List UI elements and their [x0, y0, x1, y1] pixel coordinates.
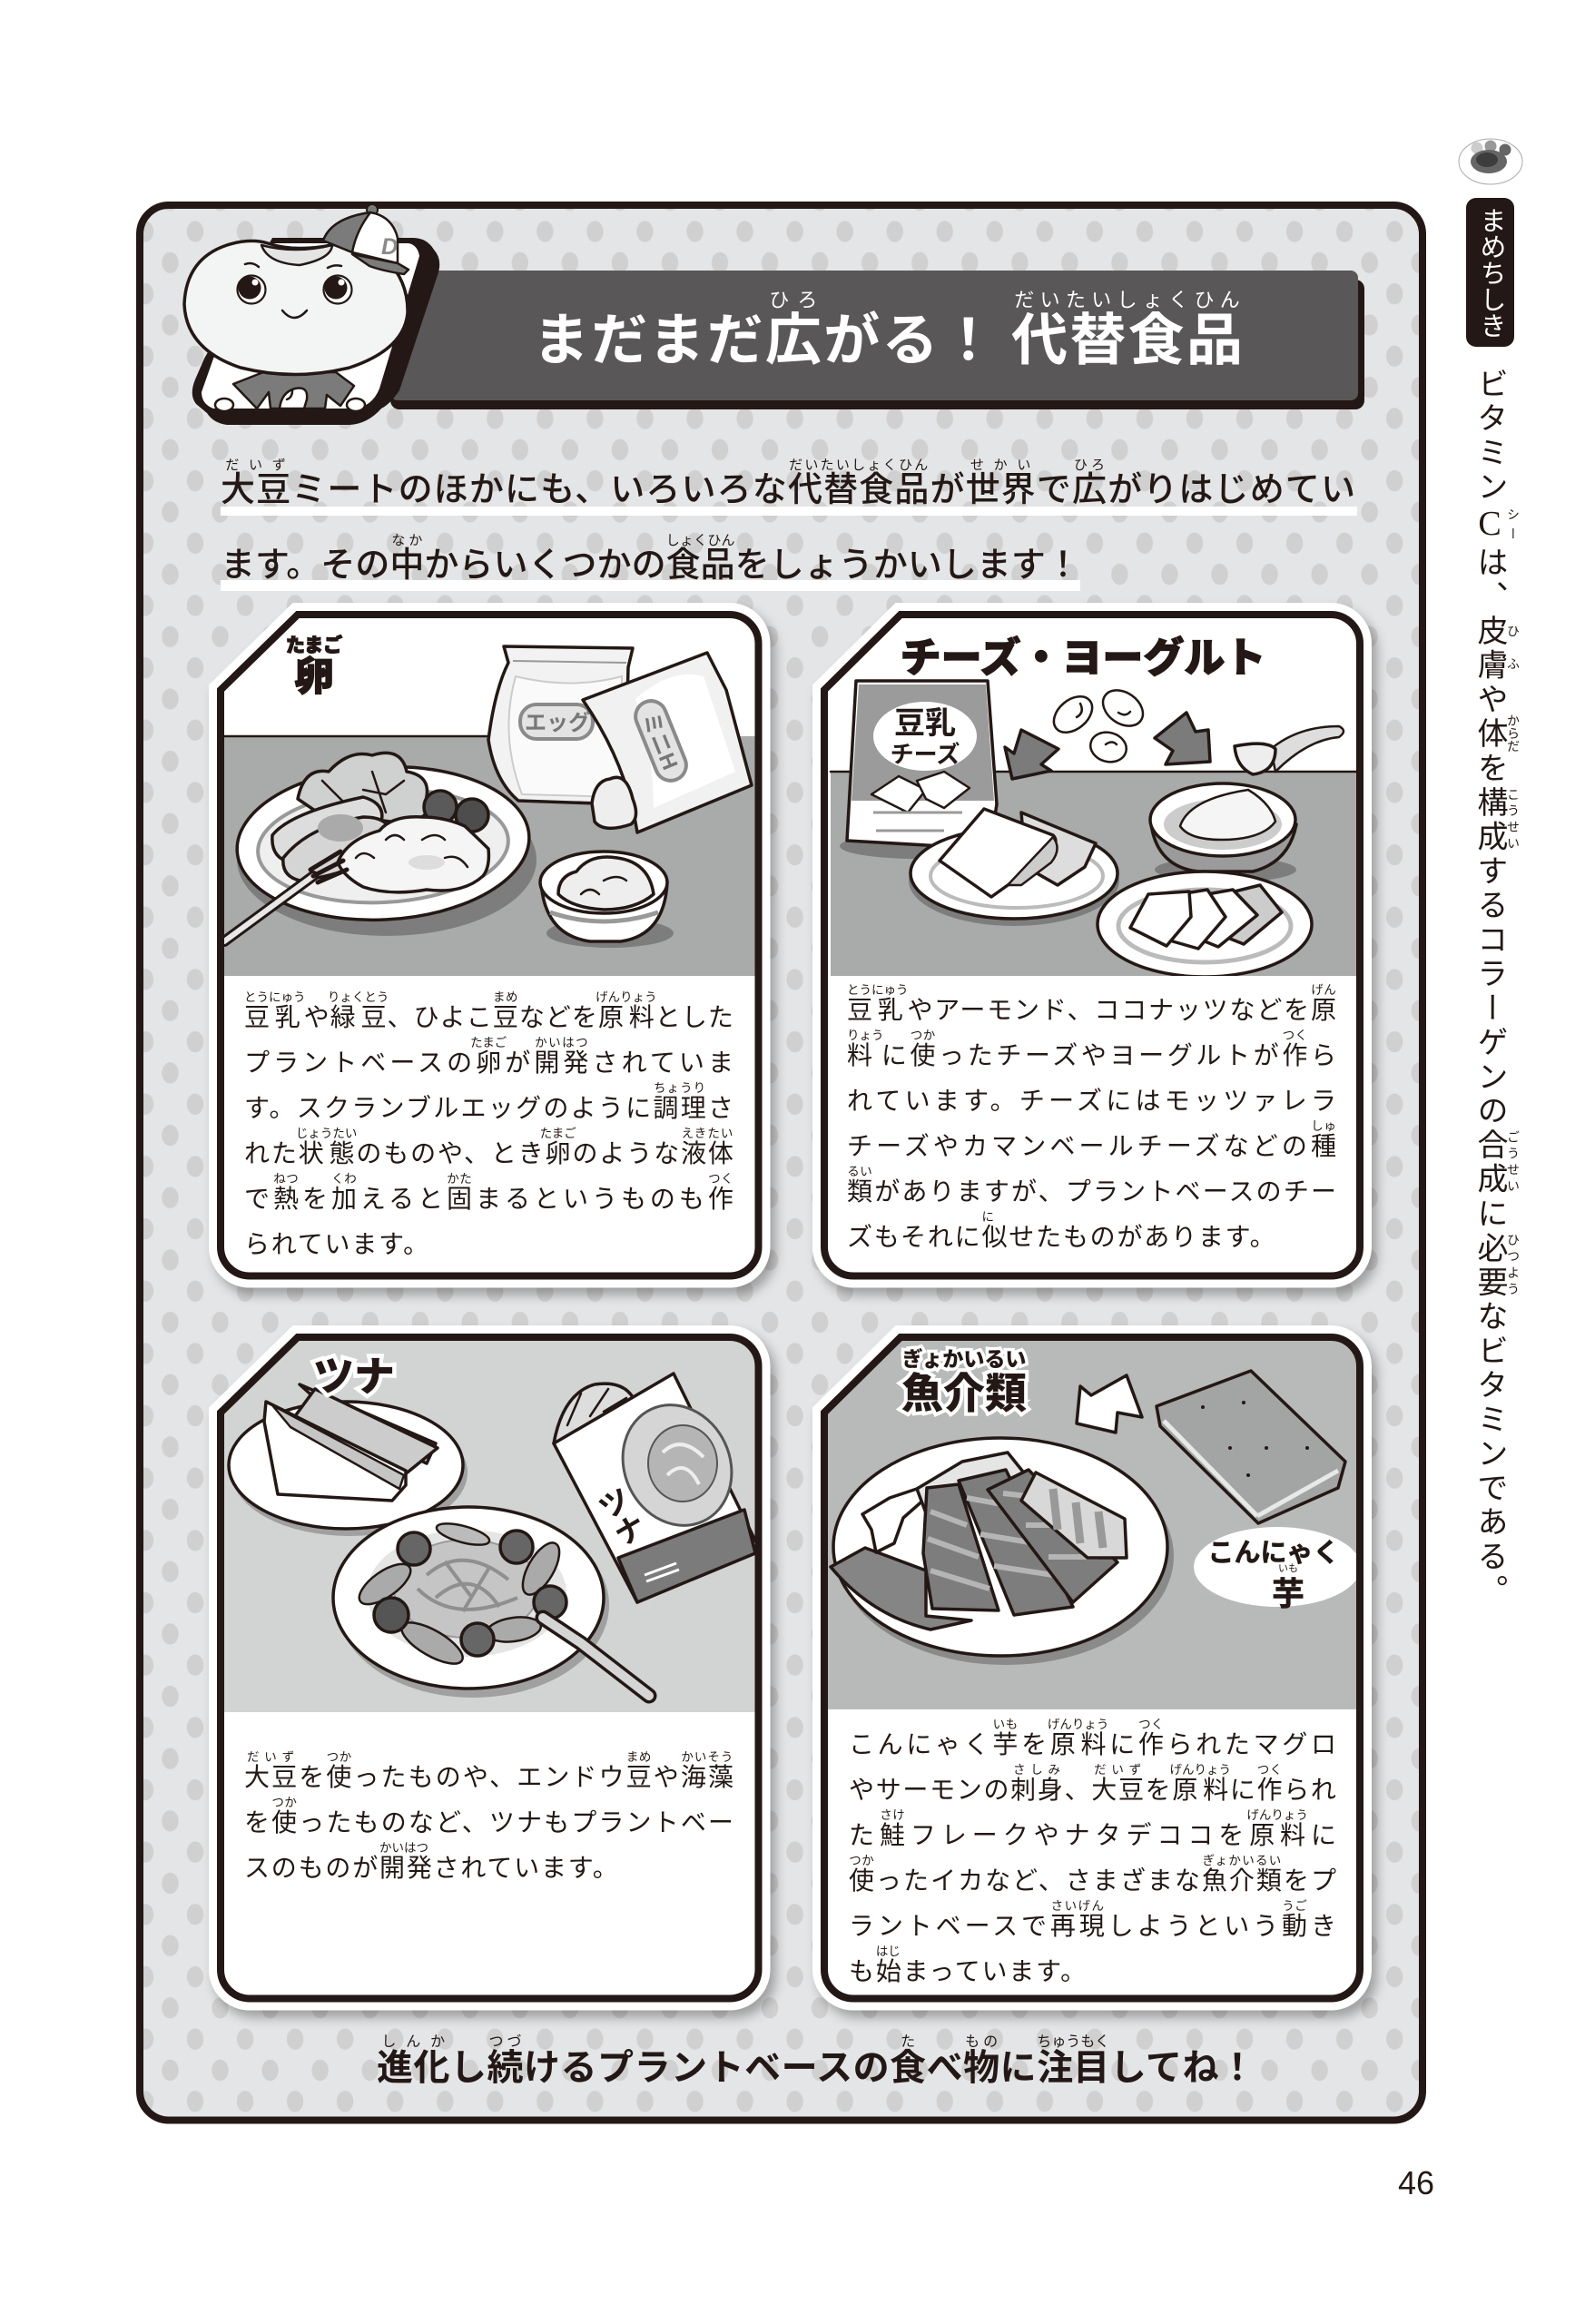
intro line 2: ます。その中なか からいくつかの食品しょくひん をしょうかいします！ — [221, 533, 1080, 585]
title banner with mascot — [182, 205, 1364, 425]
egg illustration and frame — [208, 603, 783, 1302]
egg bags: ミニH — [637, 709, 682, 773]
fork — [543, 1618, 649, 1696]
card heading: seafood — [901, 1347, 1027, 1417]
konjac label — [1194, 1527, 1361, 1612]
egg body text — [244, 990, 733, 1258]
arrow: white — [1077, 1375, 1142, 1433]
cheese illustration and frame — [812, 603, 1383, 1302]
tuna illustration and frame — [208, 1325, 783, 2024]
arrow: left — [1005, 730, 1058, 779]
plate with scrambled egg — [233, 753, 537, 936]
spoon — [1235, 726, 1344, 774]
egg bags: エッグ — [525, 710, 590, 735]
panel: seafood — [812, 1325, 1383, 2024]
seafood body text — [849, 1718, 1336, 1985]
side note vertical text: ビタミン Cシー は、 皮膚ひふ や体からだを 構成こうせい するコラーゲンの 合成ごうせい に 必要ひつよう なビタミンである。 — [1471, 368, 1521, 1605]
table — [822, 1334, 1366, 1709]
pasta plate — [333, 1507, 609, 1698]
icon: curry plate — [1458, 138, 1523, 185]
card heading: egg: たまご — [286, 635, 342, 656]
egg body text: 豆乳とうにゅう や緑豆りょくとう 、ひよこ豆まめ などを原料げんりょう とした — [244, 990, 733, 1031]
cheese body text: 料りょう に使つか ったチーズやヨーグルトが作つく ら — [847, 1029, 1336, 1069]
konjac block — [1157, 1371, 1345, 1523]
seafood illustration and frame — [812, 1325, 1383, 2024]
egg body text: で熱ねつ を加くわ えると固かた まるというものも作つく — [244, 1172, 733, 1213]
mascot card — [192, 238, 439, 425]
tuna body text: を使つか ったものなど、ツナもプラントベー — [244, 1796, 733, 1837]
card heading: tuna: ツナ — [313, 1354, 395, 1400]
page number: 46 — [1398, 2164, 1434, 2201]
soy milk cheese bag — [840, 681, 997, 859]
egg body text: られています。 — [244, 1230, 430, 1258]
egg body text: プラントベースの卵たまご が開発かいはつ されていま — [244, 1036, 733, 1077]
seafood body text: やサーモンの刺身さしみ 、大豆だいず を原料げんりょう に作つく られ — [849, 1763, 1336, 1804]
cheese body text: れています。チーズにはモッツァレラ — [847, 1087, 1336, 1115]
soy milk cheese bag: 豆乳 — [894, 706, 956, 741]
badge: mamechishiki — [1466, 198, 1514, 347]
panel: cheese and yogurt — [812, 603, 1383, 1302]
arrow: right — [1155, 713, 1210, 764]
tuna pack — [554, 1374, 755, 1602]
sashimi plate — [831, 1438, 1174, 1665]
tuna body text: 大豆だいず を使つか ったものや、エンドウ豆まめ や海藻かいそう — [244, 1750, 733, 1791]
mascot cap: D — [381, 234, 398, 260]
banner bar — [390, 271, 1364, 409]
tuna pack: ツナ — [589, 1482, 649, 1553]
cheese body text: 類るい がありますが、プラントベースのチー — [847, 1165, 1336, 1206]
cheese body text: ズもそれに似に せたものがあります。 — [847, 1210, 1276, 1251]
mascot cap — [323, 204, 409, 274]
card heading: cheese and yogurt: チーズ・ヨーグルト — [901, 635, 1265, 681]
bowl — [540, 852, 674, 948]
sandwich plate — [229, 1384, 468, 1536]
cheese body text: 豆乳とうにゅう やアーモンド、ココナッツなどを原げん — [847, 983, 1336, 1024]
tuna body text — [244, 1750, 733, 1882]
card heading: seafood: 魚介類 — [901, 1370, 1027, 1417]
card heading: egg — [286, 635, 342, 699]
cheese body text: チーズやカマンベールチーズなどの種しゅ — [847, 1119, 1336, 1160]
seafood body text: ラントベースで再現さいげん しようという動うご き — [849, 1899, 1336, 1940]
tuna body text: スのものが開発かいはつ されています。 — [244, 1841, 620, 1882]
cheese plate — [909, 809, 1119, 926]
konjac label: こんにゃく — [1207, 1539, 1340, 1568]
egg bags — [488, 646, 752, 832]
mascot head — [184, 241, 408, 374]
fork — [224, 852, 347, 941]
cheese body text — [847, 983, 1336, 1251]
egg body text: す。スクランブルエッグのように調理ちょうり さ — [244, 1081, 733, 1122]
beans — [1053, 689, 1144, 763]
konjac label: 芋 — [1272, 1575, 1304, 1612]
table — [218, 736, 763, 976]
intro line 1: 大豆だいず ミートのほかにも、いろいろな代替食品だいたいしょくひん が世界せかい で広ひろ がりはじめてい — [221, 458, 1355, 509]
closing message: 進化しんか し続つづ けるプラントベースの食た べ物もの に注目ちゅうもく してね！ — [377, 2034, 1255, 2088]
mascot body — [215, 372, 365, 411]
soy milk cheese bag: チーズ — [891, 741, 960, 768]
badge: mamechishiki: まめちしき — [1476, 207, 1505, 338]
seafood body text: た鮭さけ フレークやナタデココを原料げんりょう に — [849, 1808, 1336, 1849]
banner title text: まだまだ広ひろ がる！代替食品だいたいしょくひん — [533, 289, 1243, 372]
panel: dotted background frame — [136, 202, 1426, 2124]
table — [218, 1334, 763, 1712]
panel: egg — [208, 603, 783, 1302]
cheese slices plate — [1098, 872, 1312, 977]
seafood body text: こんにゃく芋いも を原料げんりょう に作つく られたマグロ — [849, 1718, 1336, 1758]
intro text — [221, 458, 1357, 591]
egg body text: れた状態じょうたい のものや、とき卵たまご のような液体えきたい — [244, 1127, 733, 1167]
card heading: egg: 卵 — [294, 655, 334, 699]
konjac label: いも — [1278, 1562, 1298, 1574]
seafood body text: 使つか ったイカなど、さまざまな魚介類ぎょかいるい をプ — [849, 1854, 1336, 1895]
table — [831, 772, 1366, 976]
seafood body text: も始はじ まっています。 — [849, 1945, 1088, 1985]
intro underline 2 — [221, 580, 1080, 591]
card heading: seafood: ぎょかいるい — [902, 1347, 1026, 1371]
yogurt bowl — [1150, 783, 1296, 882]
intro underline 1 — [221, 507, 1357, 516]
panel: tuna — [208, 1325, 783, 2024]
